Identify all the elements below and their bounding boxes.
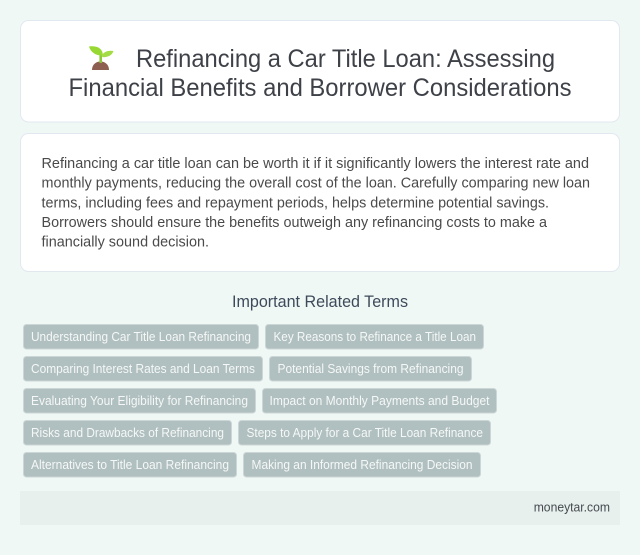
footer	[20, 491, 620, 525]
tag	[244, 452, 480, 477]
tag: Key Reasons to Refinance a Title Loan	[274, 330, 476, 344]
tag: Potential Savings from Refinancing	[278, 362, 464, 376]
tag: Risks and Drawbacks of Refinancing	[31, 426, 224, 440]
panel: summary card	[20, 134, 620, 272]
tag: Evaluating Your Eligibility for Refinancing	[31, 394, 248, 408]
tag: Understanding Car Title Loan Refinancing	[31, 330, 251, 344]
tag	[262, 388, 496, 413]
title	[68, 45, 572, 102]
icon: seedling	[89, 46, 114, 70]
heading: related terms: Important Related Terms	[232, 292, 408, 311]
footer source text: moneytar.com	[534, 501, 610, 515]
summary paragraph: monthly payments, reducing the overall cost of the loan. Carefully comparing new loan	[42, 175, 590, 192]
summary paragraph: terms, including fees and repayment periods, helps determine potential savings.	[42, 194, 549, 211]
tag	[238, 420, 490, 445]
title: Financial Benefits and Borrower Considerations	[68, 74, 572, 102]
tag	[24, 324, 258, 349]
summary paragraph	[42, 155, 590, 250]
summary paragraph: Borrowers should ensure the benefits outweigh any refinancing costs to make a	[42, 214, 548, 231]
related terms tags	[24, 324, 496, 477]
tag	[266, 324, 484, 349]
tag: Making an Informed Refinancing Decision	[252, 458, 472, 472]
tag	[24, 452, 236, 477]
tag	[24, 420, 232, 445]
panel: title card	[20, 20, 620, 122]
summary paragraph: Refinancing a car title loan can be worth it if it significantly lowers the interest rate and	[42, 155, 589, 172]
tag	[24, 388, 256, 413]
tag: Comparing Interest Rates and Loan Terms	[31, 362, 255, 376]
tag	[24, 356, 262, 381]
summary paragraph: financially sound decision.	[42, 234, 209, 250]
tag: Impact on Monthly Payments and Budget	[270, 394, 490, 408]
tag: Alternatives to Title Loan Refinancing	[31, 458, 229, 472]
tag	[270, 356, 472, 381]
title: Refinancing a Car Title Loan: Assessing	[136, 45, 555, 73]
tag: Steps to Apply for a Car Title Loan Refinance	[246, 426, 483, 440]
